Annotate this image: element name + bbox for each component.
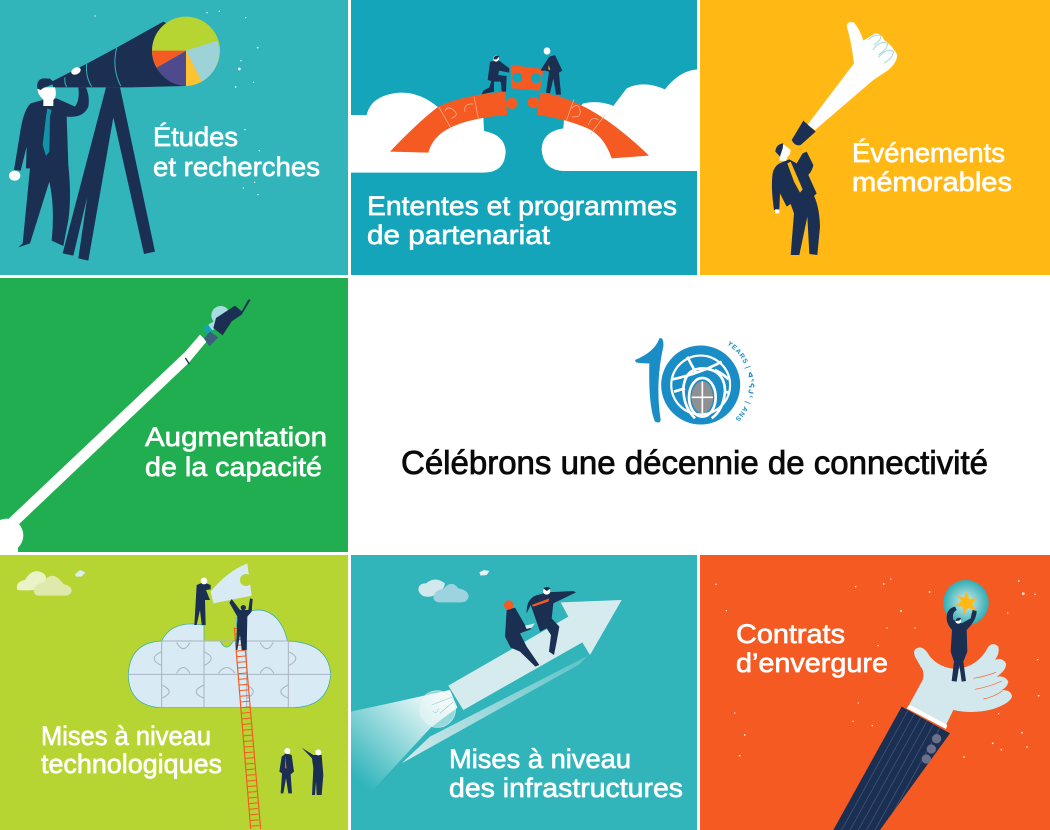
panel: mises à niveau technologiques	[0, 555, 348, 830]
heading: augmentation de la capacité: Augmentation	[145, 422, 327, 452]
heading: ententes et programmes de partenariat: de partenariat	[367, 220, 551, 250]
heading: mises à niveau technologiques: technologiques	[41, 749, 222, 779]
logo: 10 years: YEARS | ᐊᕐᕌᒍᑦ | ANS	[728, 340, 756, 422]
illustration: giant hand lifting man with star	[715, 578, 1039, 830]
panel: ententes et programmes de partenariat	[351, 0, 698, 275]
illustration: flying man with light trail	[0, 300, 251, 552]
heading: célébrons une décennie de connectivité: Célébrons une décennie de connectivité	[401, 444, 988, 481]
illustration: man with megaphone and thumbs up	[772, 22, 897, 255]
heading: contrats d'envergure: Contrats	[736, 619, 845, 649]
panel: événements mémorables	[700, 0, 1050, 275]
heading: événements mémorables: mémorables	[852, 167, 1012, 197]
illustration: rocket arrow with two men	[351, 570, 622, 793]
panel: mises à niveau des infrastructures	[351, 555, 697, 830]
heading: ententes et programmes de partenariat: Ententes et programmes	[367, 191, 677, 221]
panel: études et recherches	[0, 0, 348, 275]
heading: mises à niveau des infrastructures: des infrastructures	[449, 773, 683, 803]
heading: contrats d'envergure: d’envergure	[736, 648, 888, 678]
illustration: man with telescope	[9, 11, 260, 261]
heading: augmentation de la capacité: de la capacité	[145, 452, 322, 482]
heading: études et recherches: et recherches	[153, 152, 320, 182]
illustration: puzzle bridge on clouds	[351, 47, 698, 173]
panel: augmentation de la capacité	[0, 278, 348, 552]
panel: contrats d'envergure	[700, 555, 1050, 830]
heading: mises à niveau des infrastructures: Mises à niveau	[449, 744, 631, 774]
heading: événements mémorables: Événements	[852, 138, 1005, 168]
heading: mises à niveau technologiques: Mises à niveau	[41, 721, 211, 751]
logo: 10 years	[635, 338, 756, 424]
illustration: puzzle cloud with ladder	[17, 563, 331, 829]
heading: études et recherches: Études	[153, 122, 238, 152]
